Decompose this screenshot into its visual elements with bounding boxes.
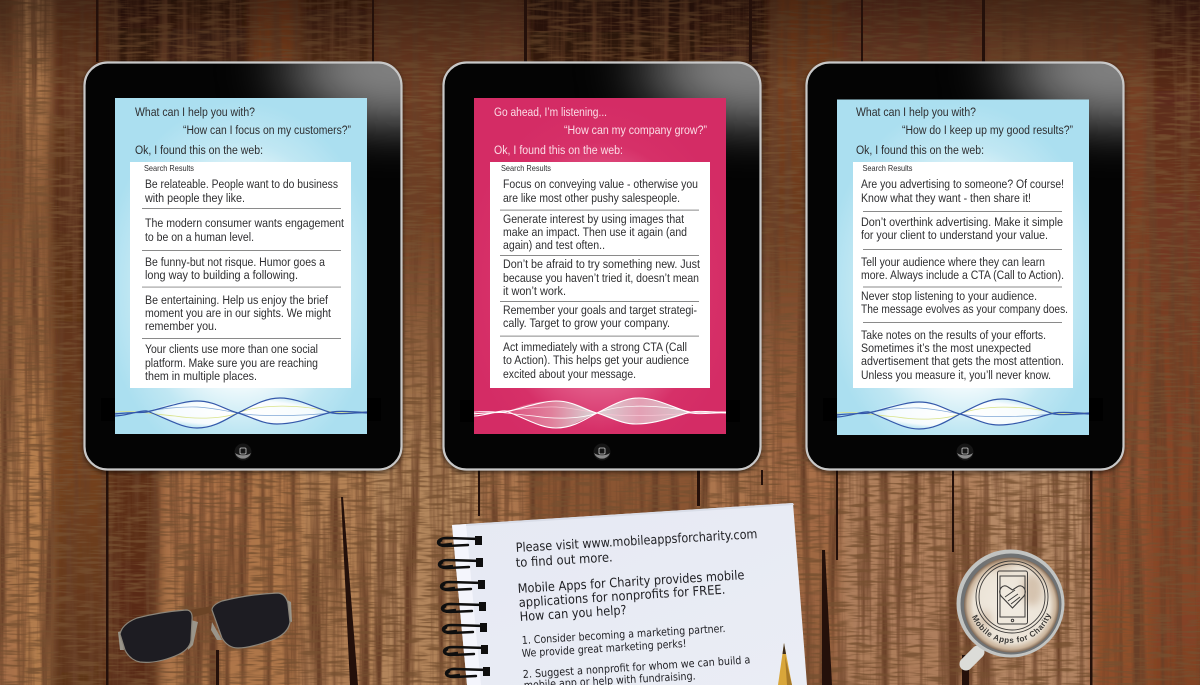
handwritten note: to find out more. [515, 550, 613, 571]
search results panel: Search Results [144, 163, 194, 173]
search results panel: Sometimes it’s the most unexpected [861, 341, 1031, 355]
prompt text: Ok, I found this on the web: [135, 143, 263, 157]
sunglasses [118, 593, 292, 662]
search results panel: Never stop listening to your audience. [861, 289, 1037, 303]
search results panel: moment you are in our sights. We might [145, 306, 331, 320]
search results panel: Unless you measure it, you’ll never know. [861, 368, 1051, 382]
search results panel: because you haven’t tried it, doesn’t mean [503, 271, 699, 285]
voice wave [115, 398, 367, 428]
right lens [212, 593, 290, 648]
handwritten note: We provide great marketing perks! [521, 637, 687, 660]
voice wave [474, 398, 726, 428]
prompt text: Ok, I found this on the web: [856, 143, 984, 157]
cup rim [956, 550, 1064, 658]
search results panel: Know what they want - then share it! [861, 191, 1031, 205]
search results panel: Search Results [501, 163, 551, 173]
search results panel: Don’t be afraid to try something new. Just [503, 257, 701, 271]
notebook [438, 503, 807, 685]
search results panel: Don’t overthink advertising. Make it simple [861, 215, 1063, 229]
coffee cup logo [956, 550, 1064, 670]
cinnamon speckle [979, 560, 1042, 629]
search results panel: The message evolves as your company does. [861, 302, 1068, 316]
screen [474, 98, 726, 434]
search results panel: it won’t work. [503, 284, 566, 298]
spiral binding [438, 536, 490, 677]
tablet 1: customers [80, 61, 406, 476]
search results panel: remember you. [145, 319, 217, 333]
tablet body [439, 61, 764, 476]
prompt text: “How can my company grow?” [564, 123, 707, 137]
bridge [190, 606, 214, 617]
prompt text: Go ahead, I’m listening... [494, 105, 607, 119]
prompt text [494, 105, 707, 157]
left lens [120, 610, 192, 662]
tablet body [802, 61, 1128, 476]
search results panel: again) and test often.. [503, 238, 605, 252]
handwritten note: Mobile Apps for Charity provides mobile [517, 568, 745, 597]
screen [837, 100, 1089, 435]
prompt text: “How do I keep up my good results?” [902, 123, 1073, 137]
frame hinges [118, 600, 292, 650]
voice wave [837, 399, 1089, 429]
screen [115, 98, 367, 434]
search results panel: them in multiple places. [145, 369, 257, 383]
search results panel: more. Always include a CTA (Call to Action). [861, 268, 1064, 282]
search results panel [853, 162, 1073, 388]
search results panel: long way to building a following. [145, 268, 298, 282]
search results panel: are like most other pushy salespeople. [503, 191, 680, 205]
search results panel: Tell your audience where they can learn [861, 255, 1045, 269]
search results panel: advertisement that gets the most attention. [861, 354, 1064, 368]
prompt text [856, 105, 1073, 157]
search results panel: Act immediately with a strong CTA (Call [503, 340, 687, 354]
search results panel: Be relateable. People want to do business [145, 177, 338, 191]
search results panel: Be funny-but not risque. Humor goes a [145, 255, 325, 269]
search results panel: Take notes on the results of your efforts. [861, 328, 1046, 342]
page [452, 503, 807, 685]
search results panel: make an impact. Then use it again (and [503, 225, 687, 239]
search results panel: Be entertaining. Help us enjoy the brief [145, 293, 328, 307]
tablet 3: keeping results [802, 61, 1128, 476]
prompt text: What can I help you with? [856, 105, 976, 119]
prompt text: “How can I focus on my customers?” [183, 123, 351, 137]
search results panel: Focus on conveying value - otherwise you [503, 177, 698, 191]
search results panel [130, 162, 351, 388]
prompt text [135, 105, 351, 157]
search results panel: Your clients use more than one social [145, 342, 318, 356]
tablet body [80, 61, 406, 476]
search results panel: to be on a human level. [145, 230, 254, 244]
handwritten note: 2. Suggest a nonprofit for whom we can build a [522, 653, 751, 681]
search results panel: excited about your message. [503, 367, 636, 381]
search results panel: Remember your goals and target strategi- [503, 303, 697, 317]
logo rings [976, 561, 1048, 633]
cup handle [966, 652, 978, 664]
handwritten note: How can you help? [519, 603, 627, 625]
handwritten note [515, 527, 758, 685]
icon: pencil [778, 643, 792, 685]
handwritten note: Please visit www.mobileappsforcharity.com [515, 527, 758, 556]
search results panel: cally. Target to grow your company. [503, 316, 670, 330]
search results panel [490, 162, 710, 388]
search results panel: platform. Make sure you are reaching [145, 356, 318, 370]
search results panel: to Action). This helps get your audience [503, 353, 689, 367]
search results panel: Are you advertising to someone? Of course! [861, 177, 1064, 191]
search results panel: Search Results [862, 163, 912, 173]
handwritten note: 1. Consider becoming a marketing partner. [521, 622, 726, 647]
search results panel: Generate interest by using images that [503, 212, 684, 226]
search results panel: with people they like. [144, 191, 245, 205]
icon: phone with heart handshake [998, 571, 1028, 624]
search results panel: for your client to understand your value. [861, 228, 1048, 242]
tablet 2: company growth [439, 61, 764, 476]
handwritten note: applications for nonprofits for FREE. [518, 583, 726, 611]
search results panel: The modern consumer wants engagement [145, 216, 344, 230]
cup text: Mobile Apps for Charity [972, 613, 1052, 644]
prompt text: What can I help you with? [135, 105, 255, 119]
prompt text: Ok, I found this on the web: [494, 143, 623, 157]
